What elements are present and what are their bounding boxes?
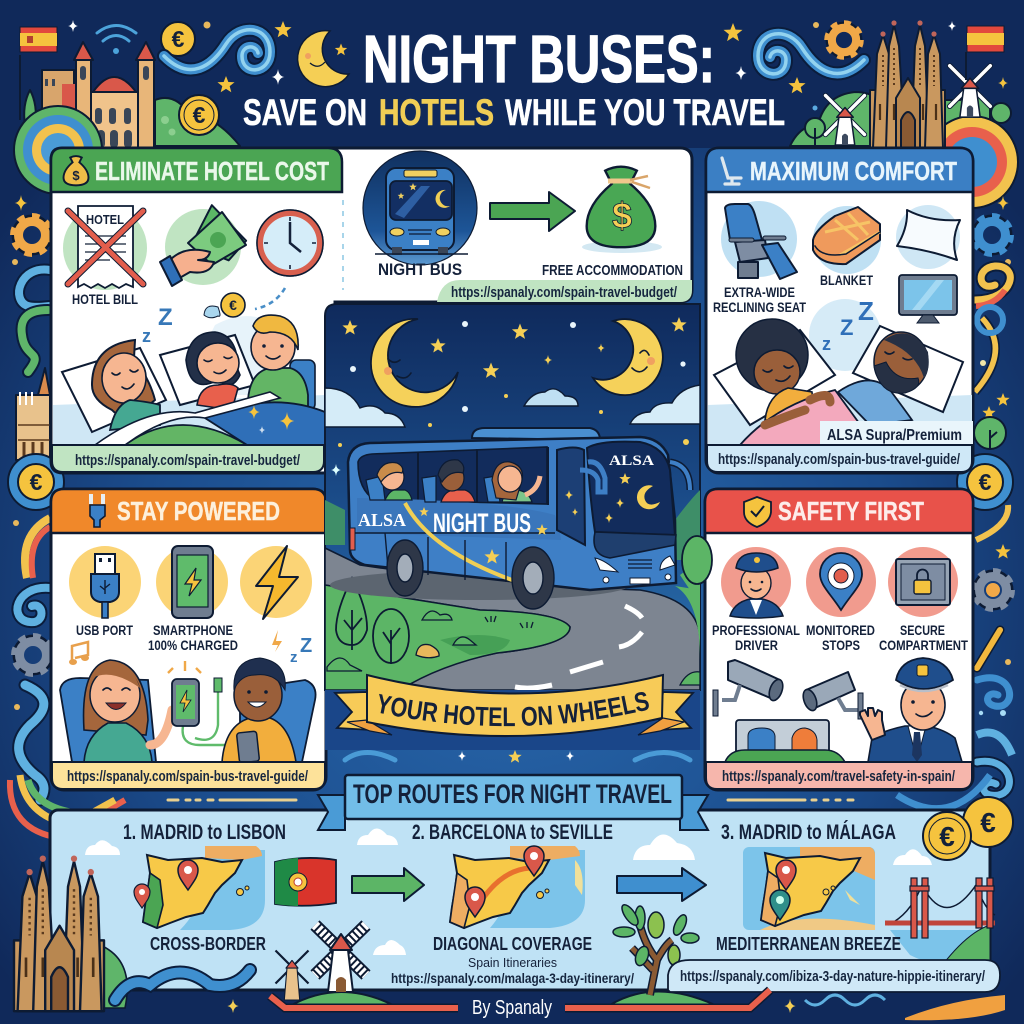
decorative border art: top left: € (172, 26, 185, 52)
icon: monitored stops (806, 547, 876, 617)
ribbon: your hotel on wheels (333, 674, 695, 738)
link strip: https://spanaly.com/spain-travel-budget/ (75, 452, 301, 469)
ribbon: your hotel on wheels: YOUR HOTEL ON WHEELS (379, 692, 649, 726)
text: spain itineraries link: https://spanaly.com/malaga-3-day-itinerary/ (391, 970, 634, 986)
heading: stay powered: STAY POWERED (117, 496, 280, 526)
label: smartphone 100% charged (148, 623, 238, 653)
footer: by spanaly (227, 990, 1005, 1020)
title: SAVE ON (243, 92, 367, 133)
illustration: passengers with phones: z (290, 649, 298, 666)
icon: night bus badge (363, 151, 477, 265)
passengers in windows (366, 460, 540, 502)
icon: portugal flag (275, 858, 336, 906)
label: alsa supra/premium: ALSA Supra/Premium (827, 427, 962, 444)
label: professional driver: DRIVER (735, 638, 778, 653)
illustration: passengers with phones (60, 630, 316, 763)
icon: hand with cash (160, 201, 248, 286)
decorative border art: right side (957, 266, 1013, 795)
icon: lightning (240, 546, 312, 619)
illustration: passengers asleep: Z (858, 296, 874, 326)
ribbon heading: top routes for night travel: TOP ROUTES FOR NIGHT TRAVEL (353, 779, 672, 809)
route 1: madrid to lisbon: 1. MADRID to LISBON (123, 821, 286, 844)
panel: safety first (705, 489, 973, 790)
bus (330, 428, 690, 609)
illustration: family sleeping on bus (53, 288, 325, 445)
label: secure compartment (879, 623, 969, 653)
icon: moon (298, 31, 349, 87)
arrow: route 2 to 3 (617, 868, 706, 901)
heading: eliminate hotel cost: $ (72, 168, 80, 183)
title: WHILE YOU TRAVEL (505, 92, 785, 133)
label: blanket: BLANKET (820, 273, 874, 288)
trees (336, 536, 712, 664)
icon: sleeping moon (371, 319, 458, 407)
bus lettering (358, 453, 654, 538)
heading: safety first: SAFETY FIRST (778, 496, 924, 526)
heading: safety first (705, 489, 973, 533)
link strip (707, 445, 972, 472)
label: extra-wide reclining seat: RECLINING SEAT (713, 300, 807, 315)
bus lettering: ALSA (358, 510, 406, 530)
route 3: madrid to malaga (716, 821, 901, 954)
panel: hero night bus scene (324, 303, 713, 750)
title: HOTELS (379, 92, 494, 133)
illustration: family sleeping on bus: € (229, 297, 237, 313)
icon: pillow (896, 205, 960, 269)
label: professional driver: PROFESSIONAL (712, 623, 800, 638)
link strip (706, 762, 972, 789)
icon: crossed hotel bill (63, 206, 147, 290)
label: night bus: NIGHT BUS (378, 260, 462, 279)
title (243, 22, 785, 133)
road dashes (515, 606, 642, 688)
text: spain itineraries link (391, 955, 634, 986)
icon: reclining seat (721, 201, 797, 279)
map 2 (450, 846, 585, 928)
road (325, 548, 700, 690)
illustration: olive tree (610, 902, 715, 1005)
label: secure compartment: COMPARTMENT (879, 638, 969, 653)
link pill (668, 960, 1000, 992)
euro coins: € (980, 807, 996, 838)
icon: screen (899, 275, 957, 323)
icon: usb port (69, 546, 141, 618)
illustration: passengers asleep: Z (840, 315, 853, 340)
route 2: barcelona to seville: 2. BARCELONA to SEVILLE (412, 821, 613, 844)
icon: smiling moon (593, 319, 663, 395)
decorative border art: top left (12, 20, 292, 265)
label: hotel bill: HOTEL BILL (72, 291, 138, 307)
decorative border art: top left: € (193, 102, 206, 128)
icon: blanket (813, 206, 881, 274)
illustration: passengers asleep: z (822, 334, 831, 354)
divider: dashed (342, 200, 344, 290)
heading: eliminate hotel cost (51, 148, 342, 192)
euro coins (923, 797, 1013, 860)
arrow: route 1 to 2 (352, 868, 424, 901)
label: diagonal coverage: DIAGONAL COVERAGE (433, 934, 592, 954)
label: smartphone 100% charged: SMARTPHONE (153, 623, 233, 638)
map 3 (743, 847, 875, 930)
clouds in sky (85, 828, 932, 955)
text: spain itineraries link: Spain Itineraries (468, 955, 557, 970)
label: secure compartment: SECURE (900, 623, 945, 638)
icon: charged smartphone (156, 546, 228, 618)
route 2: barcelona to seville (391, 821, 634, 986)
icon: money bag (582, 167, 662, 253)
panel: stay powered (51, 489, 326, 790)
icon: crossed hotel bill: HOTEL (86, 212, 124, 227)
label: monitored stops: MONITORED (806, 623, 875, 638)
euro coins: € (939, 821, 955, 852)
panel: maximum comfort (706, 148, 973, 473)
lower band (325, 690, 700, 750)
label: monitored stops: STOPS (822, 638, 860, 653)
icon: money bag: $ (612, 195, 632, 236)
illustration: bottom wave (100, 945, 250, 1008)
stars in the sky (331, 317, 689, 476)
grass (325, 560, 700, 690)
label: professional driver (712, 623, 800, 653)
title: NIGHT BUSES: (363, 22, 715, 97)
label: smartphone 100% charged: 100% CHARGED (148, 638, 238, 653)
icon: secure compartment (888, 547, 958, 617)
icon: clock (257, 210, 323, 276)
bus lettering: ALSA (609, 453, 654, 469)
decorative border art: left side: € (30, 469, 43, 495)
arrow (490, 192, 575, 231)
illustration: passengers with phones: Z (300, 635, 312, 657)
illustration: bridge (885, 878, 995, 990)
label: free accommodation: FREE ACCOMMODATION (542, 262, 683, 279)
panel: top routes (10, 775, 1013, 1011)
grass details (327, 611, 700, 685)
icon: professional driver (721, 547, 791, 618)
decorative border art: right side: € (979, 469, 992, 495)
illustration: windmills (276, 925, 395, 1006)
footer: by spanaly: By Spanaly (472, 997, 552, 1019)
label: extra-wide reclining seat (713, 285, 807, 315)
decorative band under hero (345, 750, 690, 763)
route 3: madrid to malaga: 3. MADRID to MÁLAGA (721, 821, 896, 844)
decorative border art: top right (724, 20, 1018, 265)
heading: maximum comfort: MAXIMUM COMFORT (750, 156, 957, 186)
illustration: passengers asleep (708, 296, 972, 445)
link strip: https://spanaly.com/spain-bus-travel-guide/ (67, 768, 309, 785)
panel: eliminate hotel cost (51, 148, 692, 473)
link strip: https://spanaly.com/spain-bus-travel-guide/ (718, 451, 961, 468)
label: usb port: USB PORT (76, 623, 134, 638)
link strip (52, 445, 324, 472)
heading: stay powered (51, 489, 326, 533)
bus lettering: NIGHT BUS (433, 508, 531, 538)
link strip: https://spanaly.com/travel-safety-in-spain/ (722, 768, 956, 785)
map 1 (134, 846, 265, 930)
link strip (52, 762, 325, 789)
ribbon heading: top routes for night travel (168, 775, 853, 830)
decorative border art: left side (8, 270, 64, 800)
label: mediterranean breeze: MEDITERRANEAN BREEZE (716, 934, 901, 954)
clouds (325, 385, 700, 427)
label: monitored stops (806, 623, 875, 653)
illustration: family sleeping on bus: Z (158, 304, 173, 331)
label: alsa supra/premium (820, 421, 973, 445)
heading: eliminate hotel cost: ELIMINATE HOTEL COST (95, 156, 329, 186)
illustration: sagrada familia (14, 855, 104, 1011)
label: extra-wide reclining seat: EXTRA-WIDE (724, 285, 795, 300)
illustration: family sleeping on bus: z (142, 326, 151, 346)
link pill: https://spanaly.com/spain-travel-budget/ (451, 285, 677, 301)
route 1: madrid to lisbon (123, 821, 336, 954)
heading: maximum comfort (706, 148, 973, 192)
illustration: cctv and bus stop (713, 658, 962, 762)
label: cross-border: CROSS-BORDER (150, 934, 266, 954)
link pill (437, 280, 692, 302)
